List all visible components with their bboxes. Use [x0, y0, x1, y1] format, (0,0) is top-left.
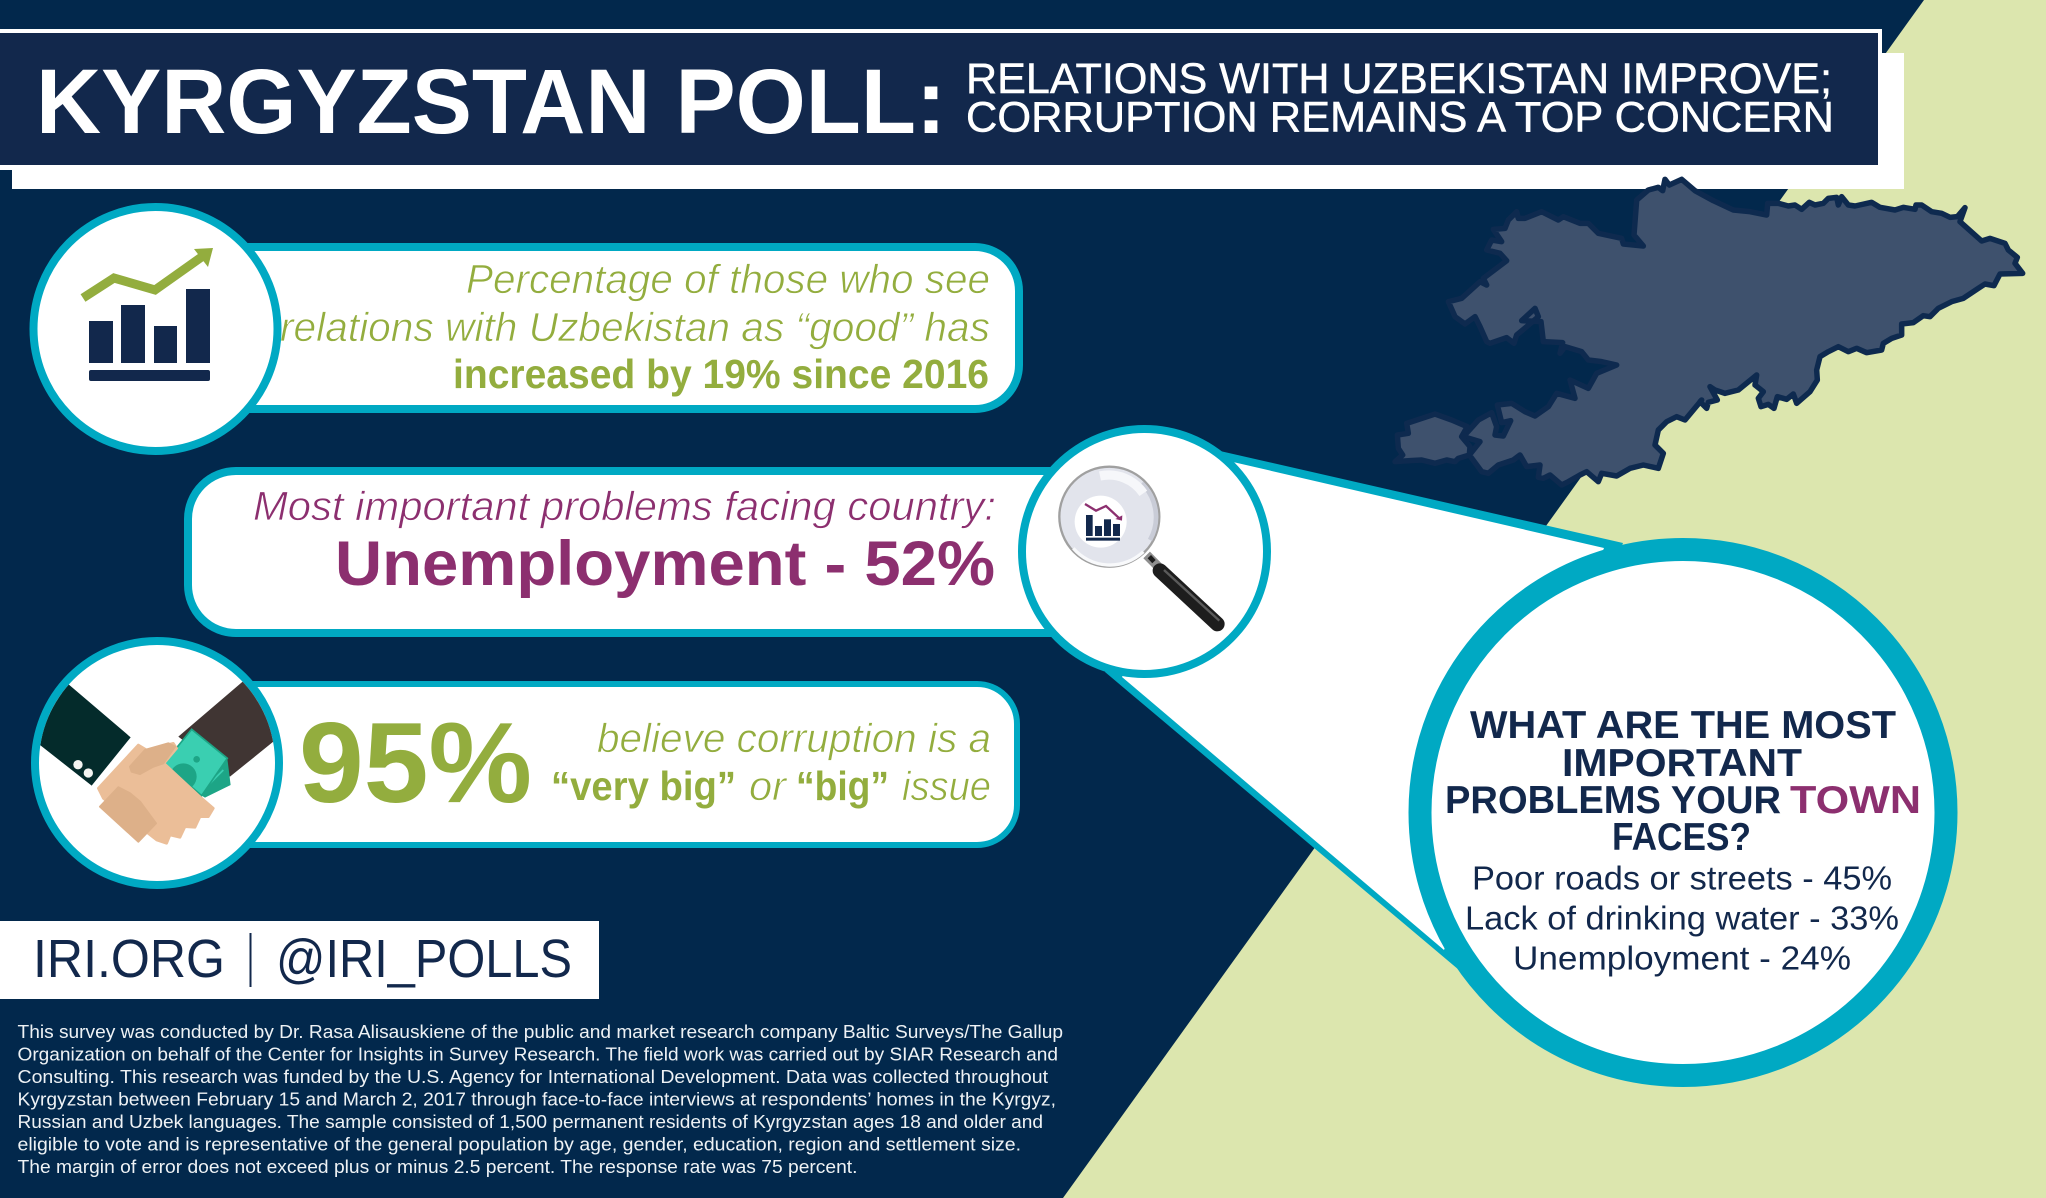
text: problems heading: Most important problems facing country: [253, 483, 996, 529]
panel: corruption [23, 641, 1017, 885]
methodology footnote [18, 1022, 1063, 1177]
methodology footnote: Kyrgyzstan between February 15 and March 2, 2017 through face-to-face interviews at respondents’ homes in the Kyrgyz, [18, 1090, 1056, 1110]
text block: relations statement [280, 256, 990, 397]
stat: 95%: 95% [299, 700, 532, 827]
methodology footnote: Organization on behalf of the Center for Insights in Survey Research. The field work was carried out by SIAR Research and [18, 1044, 1058, 1064]
methodology footnote: Russian and Uzbek languages. The sample consisted of 1,500 permanent residents of Kyrgyzstan ages 18 and older and [18, 1112, 1043, 1132]
heading: town question: TOWN [1790, 779, 1921, 822]
icon: rising bar chart [34, 207, 278, 451]
text: corruption statement [551, 715, 991, 809]
contact box [0, 921, 599, 999]
methodology footnote: eligible to vote and is representative of the general population by age, gender, education, region and settlement size. [18, 1134, 1021, 1154]
heading: town question: WHAT ARE THE MOST [1470, 704, 1896, 747]
methodology footnote: This survey was conducted by Dr. Rasa Alisauskiene of the public and market research company Baltic Surveys/The Gallup [18, 1022, 1063, 1042]
heading: town question: FACES? [1612, 816, 1751, 859]
panel: relations with Uzbekistan [34, 207, 1019, 451]
text block: relations statement: relations with Uzbekistan as “good” has [280, 304, 990, 350]
list: town problems: Lack of drinking water - 33% [1465, 900, 1899, 937]
text: corruption statement: issue [902, 763, 991, 809]
subtitle [966, 55, 1834, 142]
background: green diagonal [1063, 0, 2046, 1198]
methodology footnote: The margin of error does not exceed plus or minus 2.5 percent. The response rate was 75 percent. [18, 1157, 857, 1177]
heading: town question: IMPORTANT [1562, 742, 1803, 785]
panel: town question circle [1420, 550, 1946, 1076]
list: town problems: Unemployment - 24% [1513, 940, 1851, 977]
icon: magnifying glass [1022, 429, 1267, 674]
contact box: @IRI_POLLS [276, 929, 572, 989]
subtitle: CORRUPTION REMAINS A TOP CONCERN [966, 94, 1834, 142]
title main: KYRGYZSTAN POLL: [36, 51, 946, 153]
text: corruption statement: believe corruption is a [597, 715, 991, 761]
callout cone to town question [1105, 451, 1623, 970]
text: corruption statement: or [749, 763, 788, 809]
text block: relations statement: Percentage of those who see [466, 256, 990, 302]
text block: relations statement: increased by 19% since 2016 [453, 351, 989, 397]
heading: town question [1445, 704, 1921, 859]
contact box: IRI.ORG [33, 929, 225, 989]
map of Kyrgyzstan [1395, 179, 2023, 485]
panel: most important problems [188, 429, 1267, 674]
text: corruption statement: “very big” [551, 763, 736, 809]
text: corruption statement: “big” [796, 763, 889, 809]
list: town problems [1465, 860, 1899, 977]
methodology footnote: Consulting. This research was funded by the U.S. Agency for International Development. Data was collected throughout [18, 1067, 1048, 1087]
heading: town question: PROBLEMS YOUR [1445, 779, 1781, 822]
subtitle: RELATIONS WITH UZBEKISTAN IMPROVE; [966, 55, 1832, 103]
icon: handshake with money [23, 641, 290, 885]
list: town problems: Poor roads or streets - 45% [1472, 860, 1892, 897]
text: unemployment figure: Unemployment - 52% [335, 529, 995, 599]
title banner [0, 29, 1904, 189]
